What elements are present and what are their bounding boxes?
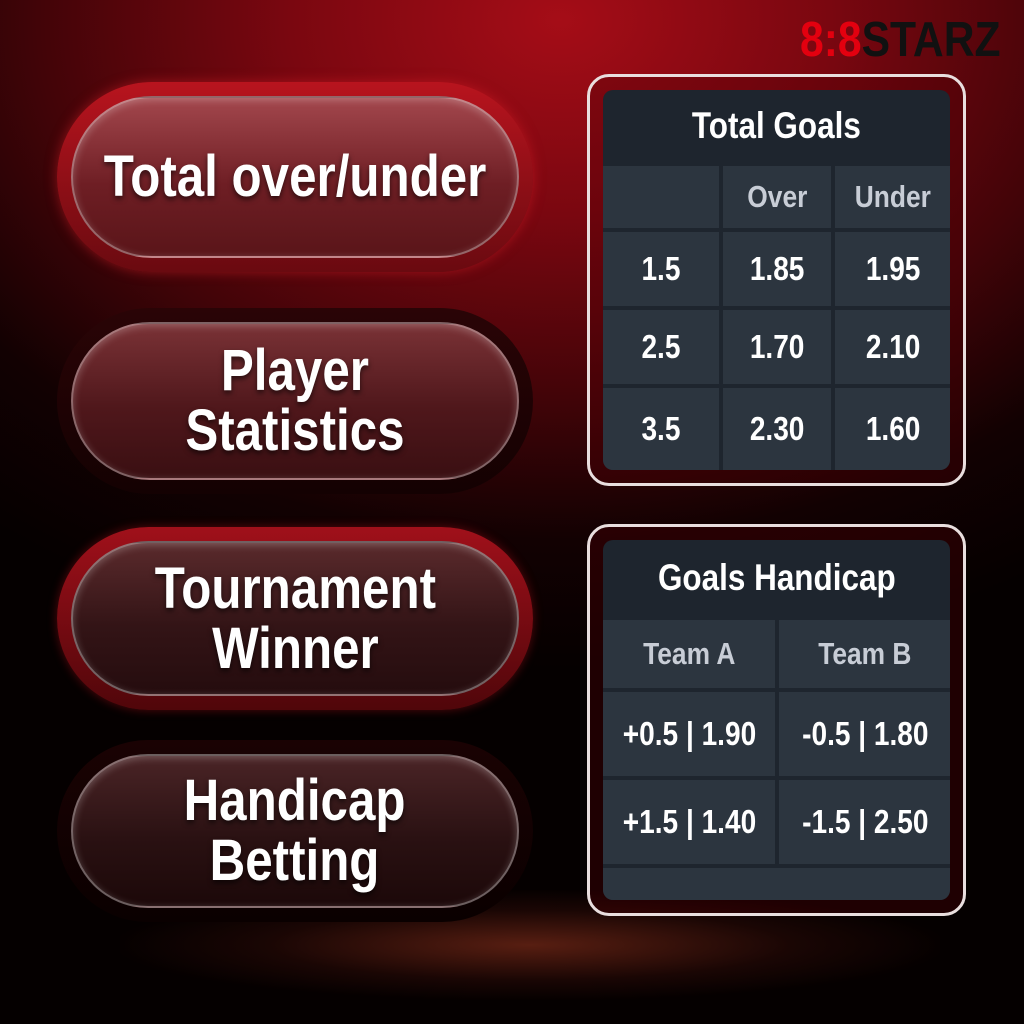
table: Total Goals: 2.5 (642, 328, 680, 365)
table: Goals Handicap (587, 524, 966, 916)
table: Goals Handicap: +1.5 | 1.40 (622, 803, 756, 840)
table: Total Goals: 3.5 (642, 410, 680, 447)
table: Goals Handicap: Team A (643, 636, 735, 671)
table: Total Goals: Over (747, 179, 807, 214)
header: Goals Handicap (658, 557, 895, 598)
pill: Tournament Winner: Winner (212, 616, 378, 680)
table: Total Goals: 1.70 (750, 328, 804, 365)
table: Total Goals (587, 74, 966, 486)
pill: Player Statistics (57, 308, 533, 494)
table: Goals Handicap: Team B (818, 636, 912, 671)
table: Total Goals: 1.5 (642, 250, 680, 287)
table: Goals Handicap: -0.5 | 1.80 (802, 715, 928, 752)
pill: Tournament Winner (57, 527, 533, 710)
pill: Handicap Betting: Betting (210, 828, 380, 893)
pill: Tournament Winner: Tournament (154, 556, 436, 620)
table: Total Goals: Under (855, 179, 931, 214)
pill: Player Statistics: Player (221, 338, 369, 403)
table: Total Goals: 1.60 (866, 410, 920, 447)
table: Goals Handicap: -1.5 | 2.50 (802, 803, 928, 840)
table: Total Goals: 2.30 (750, 410, 804, 447)
pill: Player Statistics: Statistics (185, 398, 405, 463)
pill: Handicap Betting (57, 740, 533, 922)
logo: 8:8STARZ (800, 13, 1001, 67)
table: Total Goals: 2.10 (866, 328, 920, 365)
table: Total Goals: 1.85 (750, 250, 804, 287)
pill: Handicap Betting: Handicap (184, 768, 406, 833)
table: Goals Handicap: +0.5 | 1.90 (622, 715, 756, 752)
table: Total Goals: 1.95 (866, 250, 920, 287)
pill: Total over/under: Total over/under (104, 144, 486, 209)
header: Total Goals (692, 105, 861, 146)
pill: Total over/under (57, 82, 533, 272)
